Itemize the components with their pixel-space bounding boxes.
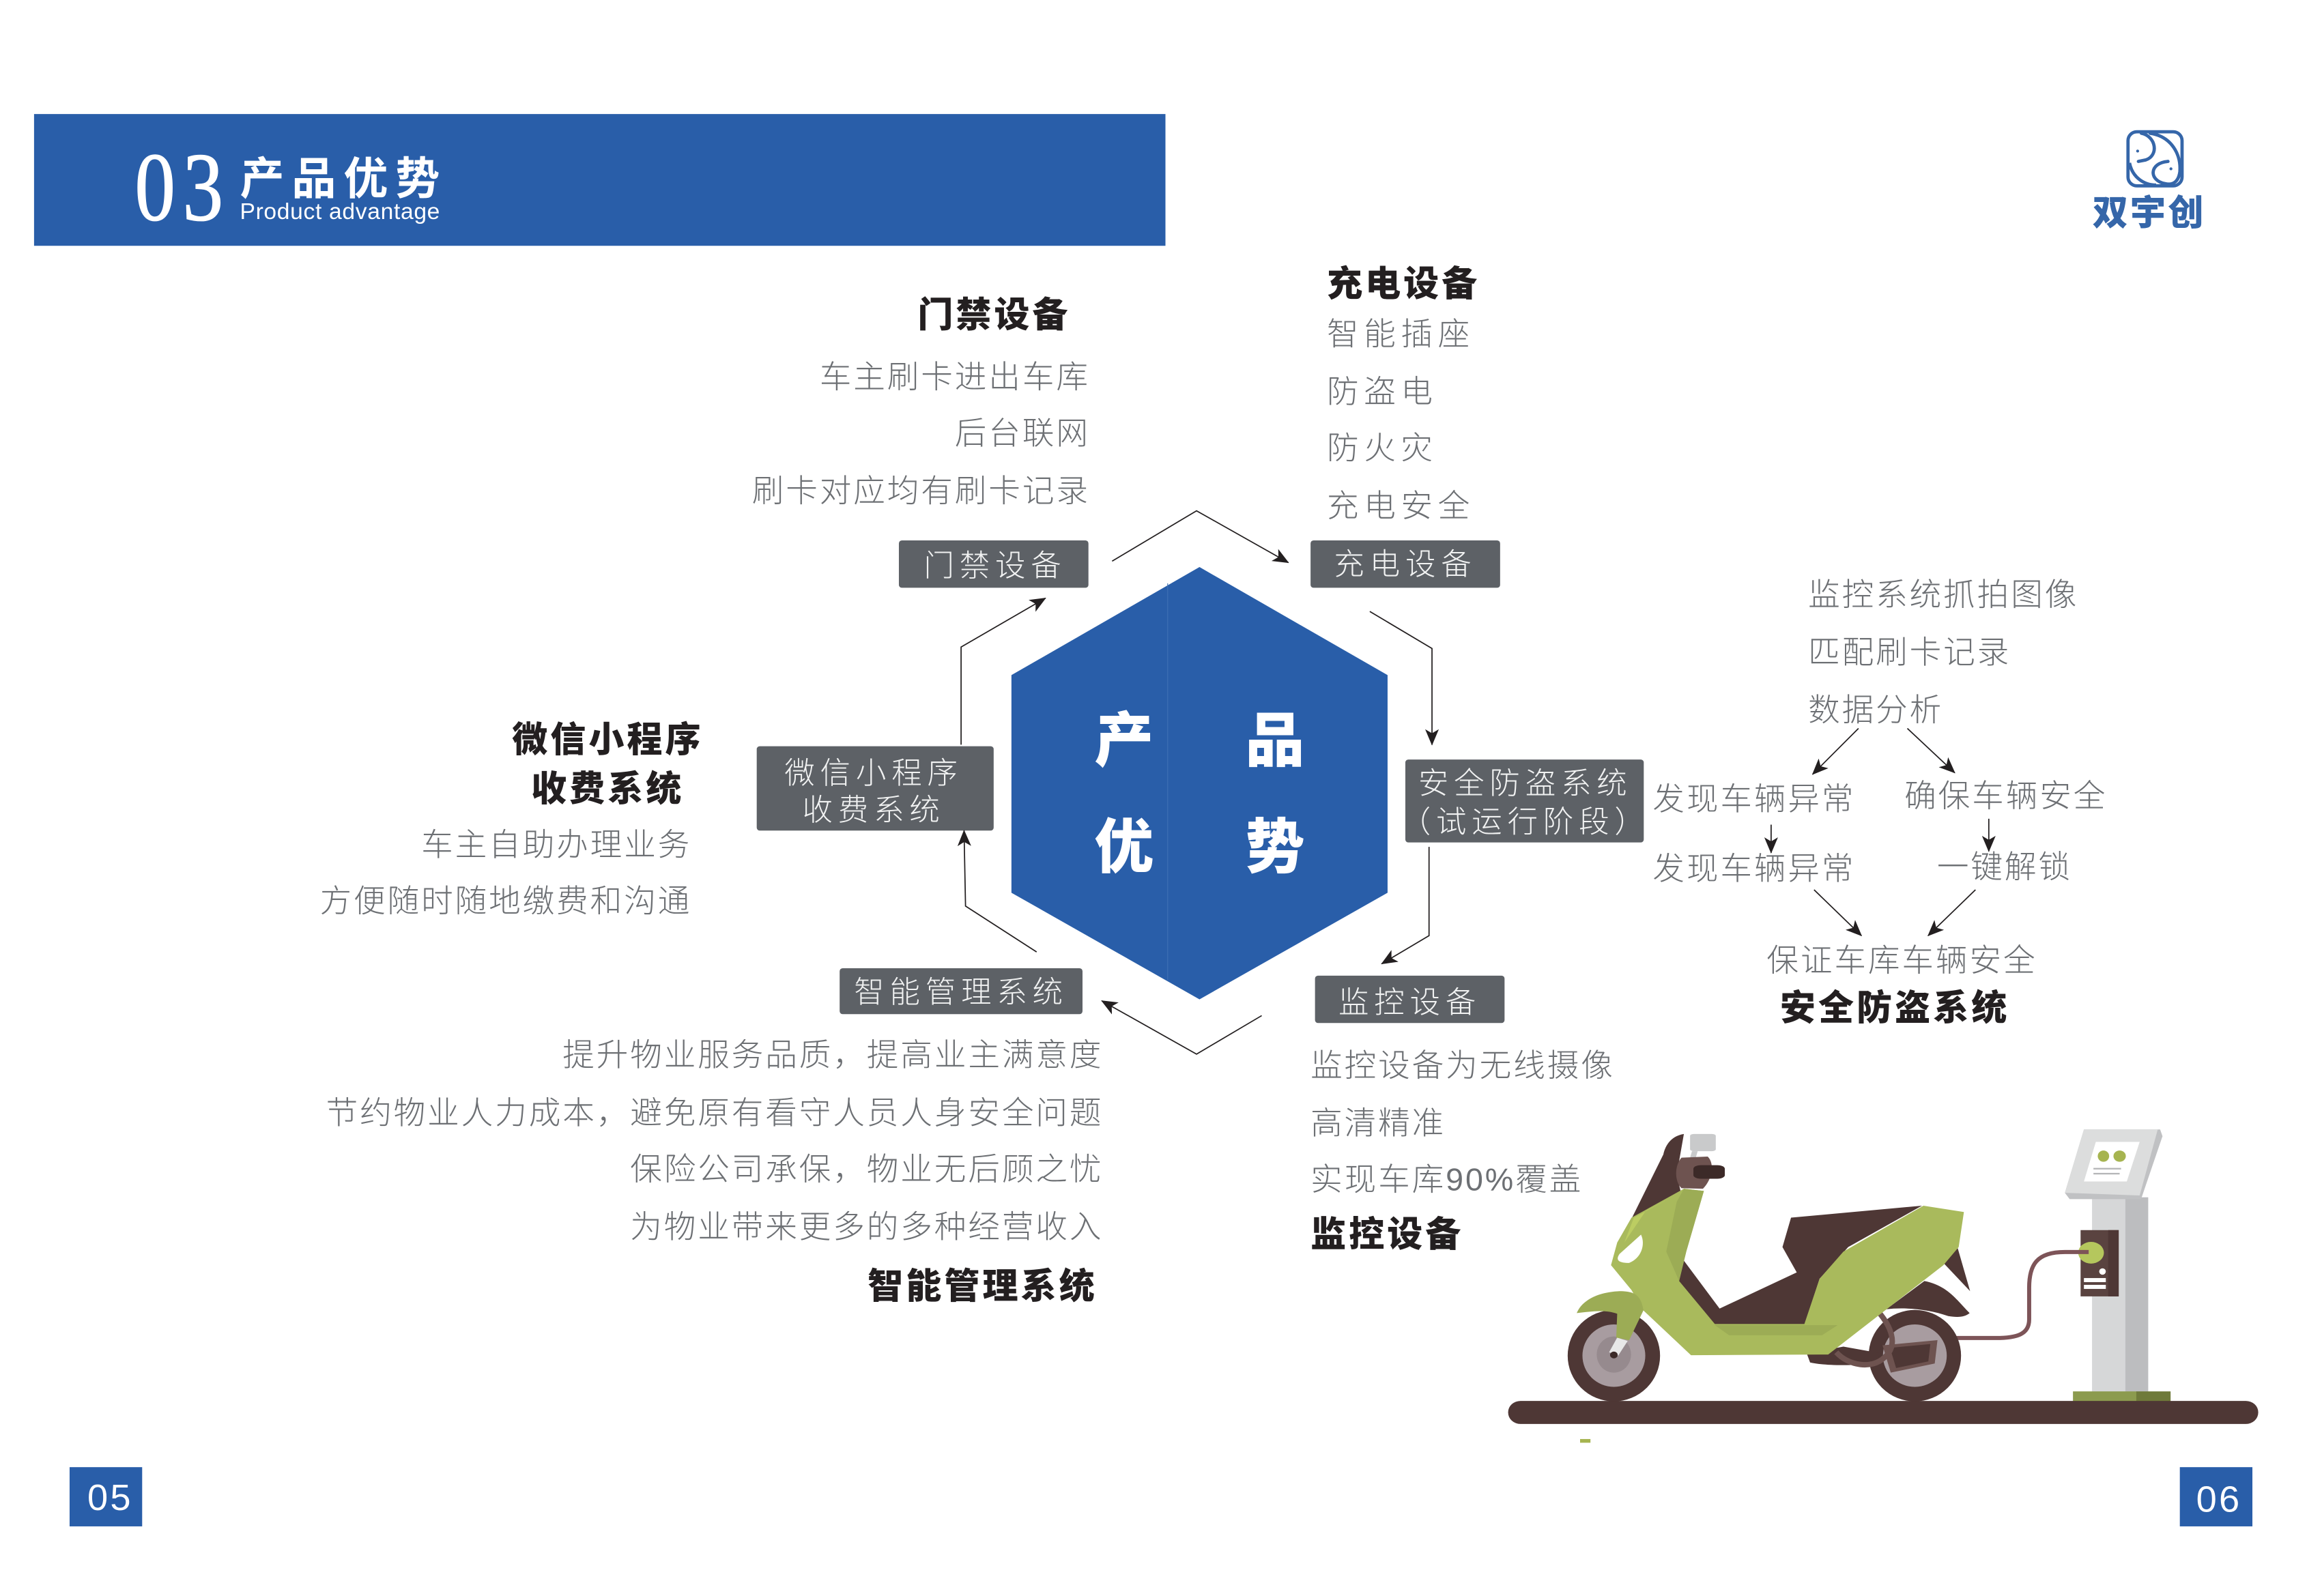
text block: smart management: 为物业带来更多的多种经营收入	[630, 1209, 1103, 1245]
text block: access control	[752, 296, 1090, 509]
flow steps: 发现车辆异常	[1652, 851, 1855, 886]
logo wordmark: 双宇创	[2093, 194, 2203, 233]
flow steps: 一键解锁	[1937, 850, 2072, 885]
flow arrows	[1771, 729, 1989, 935]
text block: monitoring: 实现车库90%覆盖	[1310, 1161, 1583, 1197]
tag: anti-theft: 安全防盗系统	[1418, 767, 1633, 800]
logo mark	[2128, 132, 2182, 186]
flow steps: 监控系统抓拍图像	[1808, 577, 2078, 612]
text block: WeChat payment	[320, 721, 704, 919]
ground	[1508, 1401, 2259, 1424]
text block: monitoring	[1310, 1047, 1615, 1255]
text block: access control: 门禁设备	[917, 296, 1071, 336]
flow steps: 发现车辆异常	[1652, 781, 1855, 817]
tag: access control: 门禁设备	[923, 549, 1067, 583]
mirror	[1690, 1134, 1716, 1151]
text block: WeChat payment: 方便随时随地缴费和沟通	[320, 884, 691, 919]
text block: charging: 防盗电	[1327, 374, 1438, 409]
small green mark	[1580, 1439, 1590, 1442]
tag: WeChat	[757, 746, 994, 830]
text block: monitoring: 监控设备为无线摄像	[1310, 1047, 1615, 1083]
under body	[1807, 1347, 1882, 1365]
charging post	[2065, 1129, 2170, 1402]
text block: access control: 刷卡对应均有刷卡记录	[752, 474, 1090, 509]
scooter body	[1611, 1189, 1964, 1355]
page number: left: 05	[87, 1477, 133, 1518]
text block: WeChat payment: 车主自助办理业务	[421, 827, 691, 862]
charging cable	[1953, 1252, 2089, 1338]
tag: monitoring	[1315, 976, 1504, 1023]
tag: smart management: 智能管理系统	[854, 976, 1068, 1009]
tag: charging	[1310, 540, 1500, 587]
front wheel	[1568, 1310, 1660, 1402]
flow steps: 保证车库车辆安全	[1766, 942, 2037, 978]
text block: charging: 智能插座	[1327, 317, 1475, 352]
text block: access control: 后台联网	[955, 416, 1090, 451]
text block: monitoring: 监控设备	[1310, 1215, 1463, 1255]
text block: smart management: 保险公司承保，物业无后顾之忧	[630, 1151, 1103, 1187]
text block: charging: 充电设备	[1327, 265, 1480, 304]
hexagon label: 品	[1246, 708, 1304, 774]
windshield	[1631, 1134, 1684, 1219]
text block: access control: 车主刷卡进出车库	[820, 360, 1090, 395]
text block: monitoring: 高清精准	[1310, 1105, 1446, 1141]
text block: smart management: 提升物业服务品质，提高业主满意度	[562, 1037, 1103, 1073]
tag: access control	[899, 540, 1089, 587]
text block: charging	[1327, 265, 1480, 523]
hexagon label: 势	[1246, 814, 1304, 880]
hexagon label: 产	[1094, 708, 1153, 774]
handlebar	[1676, 1157, 1712, 1189]
tag: smart management	[840, 968, 1083, 1014]
tag: monitoring: 监控设备	[1338, 986, 1481, 1019]
page number: left	[70, 1467, 142, 1526]
tag: charging: 充电设备	[1334, 548, 1477, 581]
text block: smart management	[326, 1037, 1103, 1307]
logo	[2093, 132, 2203, 233]
tag: anti-theft: （试运行阶段）	[1401, 805, 1650, 839]
text block: WeChat payment: 微信小程序	[512, 721, 704, 760]
section title: 产品优势	[240, 154, 440, 203]
cycle arrows around hexagon	[961, 511, 1432, 1054]
section subtitle: Product advantage	[240, 199, 440, 224]
flow steps	[1652, 577, 2107, 978]
flow: anti-theft system	[1652, 577, 2107, 1028]
text block: smart management: 节约物业人力成本，避免原有看守人员人身安全问题	[326, 1095, 1103, 1131]
flow steps: 数据分析	[1808, 693, 1943, 728]
hexagon label	[1094, 708, 1304, 880]
flow steps: 确保车辆安全	[1904, 779, 2107, 814]
seat and dark panel	[1677, 1206, 1922, 1325]
tag: WeChat: 收费系统	[803, 794, 945, 827]
text block: smart management: 智能管理系统	[868, 1267, 1098, 1307]
tag: WeChat: 微信小程序	[784, 757, 963, 790]
flow steps: 匹配刷卡记录	[1808, 635, 2011, 670]
front fender	[1577, 1291, 1644, 1340]
text block: charging: 充电安全	[1327, 488, 1475, 523]
central hexagon	[1012, 567, 1388, 1000]
flow heading: 安全防盗系统	[1780, 989, 2009, 1028]
tag: anti-theft	[1401, 759, 1650, 843]
text block: charging: 防火灾	[1327, 431, 1438, 466]
text block: WeChat payment: 收费系统	[531, 770, 684, 809]
illustration: electric scooter charging	[1508, 1129, 2259, 1424]
page number: right: 06	[2196, 1479, 2241, 1520]
hexagon label: 优	[1094, 814, 1153, 880]
rear fender	[1887, 1281, 1970, 1317]
rear wheel	[1869, 1310, 1961, 1402]
page number: right	[2180, 1467, 2252, 1526]
section number: 03	[134, 134, 231, 242]
header banner	[34, 114, 1166, 246]
